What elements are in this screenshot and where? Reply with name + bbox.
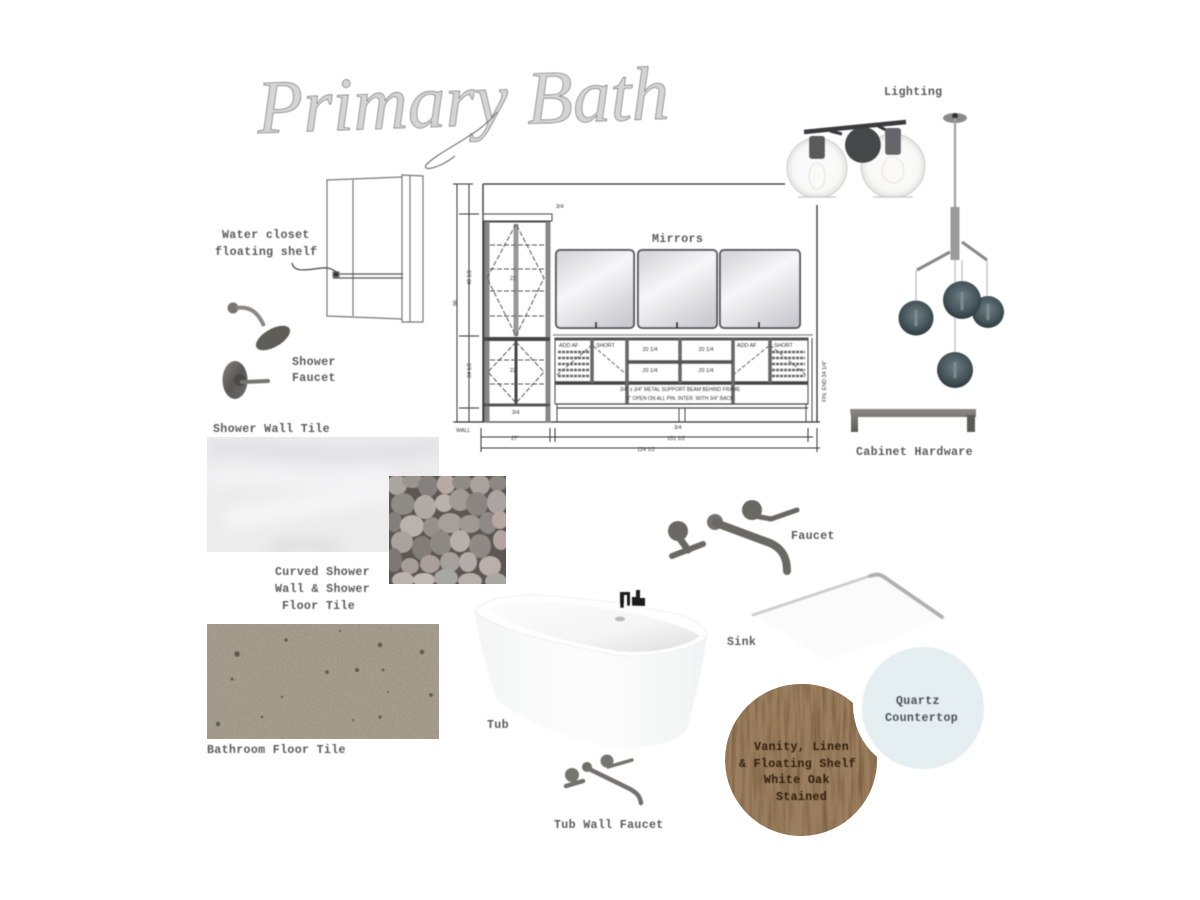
label: faucet: Faucet [791,530,835,543]
swatch: white oak wood with label: & Floating Shelf [739,758,856,771]
vanity notes: 20 1/4 [698,347,714,353]
mirrors [556,250,800,328]
label: cabinet hardware: Cabinet Hardware [856,446,973,459]
dimension labels: 101 1/2 [667,436,685,442]
label: mirrors: Mirrors [652,233,703,246]
dimension labels: 96 [453,300,459,306]
cabinet elevation drawing [453,184,828,453]
label: water closet floating shelf [215,229,317,259]
label: shower faucet: Faucet [292,372,336,385]
vanity notes: 8" OPEN ON ALL PIN. INTER. WITH 3/4" BACK [626,396,734,402]
swatch: white oak wood with label [725,684,878,836]
label: shower faucet [292,356,336,385]
dimension labels: WALL [456,428,470,434]
label: tub: Tub [487,719,509,732]
sink [753,575,942,660]
vanity notes: ADD AF [559,343,579,349]
label: shower faucet: Shower [292,356,336,369]
vanity notes: 20 1/4 [642,368,658,374]
linen tower: 3/4 [512,410,520,416]
linen tower: 3/4 [556,204,564,210]
label: curved shower wall and floor tile [275,566,370,613]
dimension labels: 124 1/2 [637,447,655,453]
swatch: quartz countertop with label: Countertop [885,712,958,725]
vanity notes: 20 1/4 [698,368,714,374]
swatch: white oak wood with label: White Oak [764,774,830,787]
linen tower: 22 [510,276,516,282]
vanity notes [559,343,793,431]
swatch: white oak wood with label: Vanity, Linen [754,741,849,754]
dimension labels: 40 1/2 [467,270,473,285]
label: tub wall faucet: Tub Wall Faucet [554,819,664,832]
icon: cabinet hardware pull [850,409,976,432]
dimension labels: 27" [511,436,519,442]
label: curved shower wall and floor tile: Floor Tile [282,600,355,613]
title: Primary Bath [255,52,670,150]
icon: shower head [228,302,294,355]
icon: tub filler [620,590,645,608]
label: curved shower wall and floor tile: Wall & Shower [275,583,370,596]
vanity [553,335,813,422]
swatch: bathroom floor tile [207,624,439,739]
swatch: quartz countertop with label [862,647,984,769]
pendant light [898,113,1004,388]
vanity notes: SHORT [596,343,615,349]
label: curved shower wall and floor tile: Curved Shower [275,566,370,579]
label: shower wall tile: Shower Wall Tile [213,423,330,436]
swatch: pebble tile [389,476,506,584]
dimension labels [453,270,828,453]
label: lighting: Lighting [884,86,942,99]
dimension labels: FIN. END 34 1/4" [822,360,828,402]
swatch: white oak wood with label: Stained [776,791,827,804]
icon: tub wall faucet [565,754,641,803]
bathtub [475,590,707,748]
icon: sink faucet [668,500,797,571]
label: sink: Sink [727,636,756,649]
label: water closet floating shelf: Water closet [222,229,310,242]
linen tower: 22 [510,368,516,374]
icon: shower valve [222,361,268,399]
water closet floating shelf elevation [292,175,423,322]
vanity notes: SHORT [774,343,793,349]
swatch: quartz countertop with label: Quartz [896,695,940,708]
sconce light [787,122,925,198]
wall and dimension lines [453,184,820,452]
vanity notes: 3/4" x 3/4" METAL SUPPORT BEAM BEHIND FRAME [620,387,741,393]
vanity notes: 20 1/4 [642,347,658,353]
linen tower [483,204,564,422]
dimension labels: 34 1/2 [467,363,473,378]
swatch: shower wall marble tile [207,437,439,552]
vanity notes: ADD AF [737,343,757,349]
vanity notes: 3/4 [674,425,682,431]
label: water closet floating shelf: floating shelf [215,246,317,259]
label: bathroom floor tile: Bathroom Floor Tile [207,744,346,757]
